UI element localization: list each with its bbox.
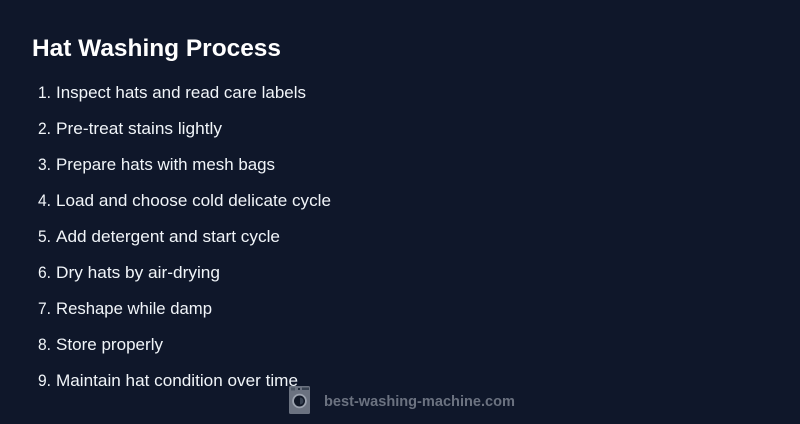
step 9: Maintain hat condition over time (56, 372, 298, 390)
step 5: Add detergent and start cycle (56, 228, 280, 246)
step 3: 3. (38, 156, 51, 174)
step 2: Pre-treat stains lightly (56, 120, 223, 138)
step 2: 2. (38, 120, 51, 138)
icon: washing machine (289, 386, 310, 414)
step 6: 6. (38, 264, 51, 282)
step 5: 5. (38, 228, 51, 246)
title: Hat Washing Process (32, 35, 281, 62)
step 7: Reshape while damp (56, 300, 212, 318)
step 9: 9. (38, 372, 51, 390)
step 1: 1. (38, 84, 51, 102)
step 3: Prepare hats with mesh bags (56, 156, 275, 174)
step 6: Dry hats by air-drying (56, 264, 220, 282)
footer website label: best-washing-machine.com (324, 394, 515, 410)
step 4: Load and choose cold delicate cycle (56, 192, 331, 210)
step 8: Store properly (56, 336, 164, 354)
step 7: 7. (38, 300, 51, 318)
numbered list of steps (38, 84, 331, 390)
step 4: 4. (38, 192, 51, 210)
step 1: Inspect hats and read care labels (56, 84, 306, 102)
step 8: 8. (38, 336, 51, 354)
